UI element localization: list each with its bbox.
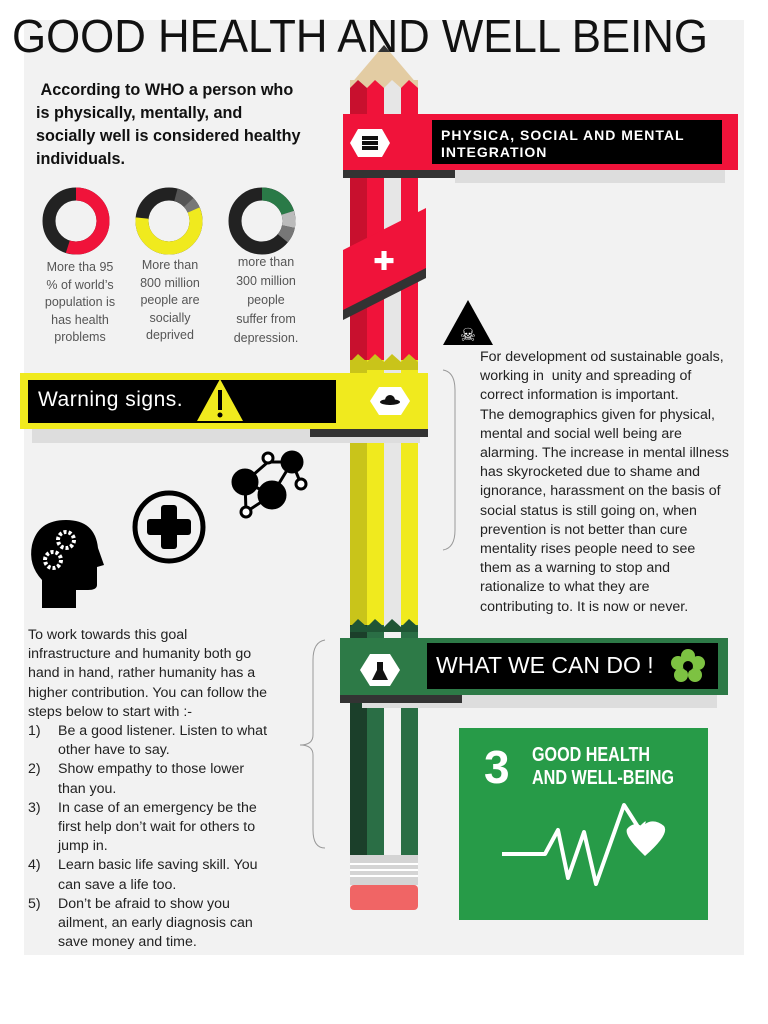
donut captions: has health (51, 312, 109, 326)
SDG 3 box: GOOD HEALTH (532, 744, 650, 766)
left list text: In case of an emergency be the (58, 800, 257, 816)
left list text: 1) (28, 723, 41, 739)
donut captions: more than (238, 255, 294, 269)
yellow bar (20, 373, 428, 443)
icon: planet hexagon (370, 387, 410, 415)
left list text: higher contribution. You can follow the (28, 685, 267, 701)
puzzle ribbon (343, 208, 426, 320)
donut captions: suffer from (236, 312, 296, 326)
intro text: individuals. (36, 150, 125, 168)
bracket left list (300, 640, 325, 848)
donut captions: % of world’s (46, 278, 114, 292)
left list text: than you. (58, 781, 116, 797)
left list text: Don’t be afraid to show you (58, 896, 230, 912)
right text block: them as a warning to stop and (480, 560, 670, 576)
right text block: working in unity and spreading of (480, 368, 691, 384)
right text block: correct information is important. (480, 387, 679, 403)
left list text: can save a life too. (58, 877, 176, 893)
intro text: is physically, mentally, and (36, 104, 242, 122)
bar label: physical social mental (441, 127, 685, 160)
SDG 3 box: 3 (484, 741, 510, 793)
right text block: alarming. The increase in mental illness (480, 445, 729, 461)
right text block: ignorance, harassment on the basis of (480, 483, 721, 499)
left list text: 3) (28, 800, 41, 816)
donut captions (45, 255, 298, 345)
green bar (340, 638, 728, 708)
puzzle ribbon: ✚ (373, 246, 395, 276)
bar label: warning signs: Warning signs. (38, 388, 183, 411)
right text block: social status is still going on, when (480, 503, 697, 519)
donut charts (49, 194, 289, 248)
right text block: For development od sustainable goals, (480, 349, 724, 365)
icon: skull triangle: ☠ (460, 325, 476, 345)
left list text: jump in. (58, 838, 108, 854)
intro text: According to WHO a person who (40, 81, 293, 99)
donut captions: More tha 95 (47, 260, 113, 274)
right text block: mentality rises people need to see (480, 541, 695, 557)
left list text: 4) (28, 857, 41, 873)
right text block: mental and social well being are (480, 426, 682, 442)
icon: network (233, 452, 306, 517)
bracket right text (443, 370, 455, 550)
donut captions: population is (45, 295, 115, 309)
donut captions: depression. (234, 331, 298, 345)
SDG 3 box: AND WELL-BEING (532, 767, 674, 789)
donut captions: people are (140, 293, 200, 307)
intro text (36, 81, 301, 168)
left list text: Learn basic life saving skill. You (58, 857, 258, 873)
donut captions: More than (142, 258, 198, 272)
right text block: contributing to. It is now or never. (480, 599, 688, 615)
bar label: physical social mental: PHYSICA, SOCIAL AND MENTAL (441, 127, 685, 143)
intro text: socially well is considered healthy (36, 127, 301, 145)
icon: books hexagon (350, 129, 390, 157)
left list text: Show empathy to those lower (58, 761, 244, 777)
left list text: steps below to start with :- (28, 704, 192, 720)
donut captions: 800 million (140, 276, 200, 290)
left list text (28, 627, 267, 950)
bar label: physical social mental: INTEGRATION (441, 144, 547, 160)
red bar (343, 114, 738, 183)
left list text: ailment, an early diagnosis can (58, 915, 253, 931)
icon: flask hexagon (360, 654, 400, 686)
left list text: Be a good listener. Listen to what (58, 723, 267, 739)
donut captions: deprived (146, 328, 194, 342)
icon: skull triangle (443, 300, 493, 345)
donut captions: people (247, 293, 285, 307)
donut captions: problems (54, 330, 106, 344)
donut captions: socially (150, 310, 190, 324)
icon: head with gears (31, 520, 104, 608)
left list text: 2) (28, 761, 41, 777)
right text block: has skyrocketed due to shame and (480, 464, 700, 480)
icon: flower (671, 649, 705, 682)
icon: medical plus (135, 493, 203, 561)
left list text: hand in hand, rather humanity has a (28, 665, 255, 681)
pencil (350, 45, 418, 910)
right text block: The demographics given for physical, (480, 407, 715, 423)
donut captions: 300 million (236, 274, 296, 288)
left list text: To work towards this goal (28, 627, 187, 643)
left list text: other have to say. (58, 742, 170, 758)
SDG 3 box (459, 728, 708, 920)
right text block: rationalize to what they are (480, 579, 650, 595)
left list text: 5) (28, 896, 41, 912)
left list text: first help don’t wait for others to (58, 819, 255, 835)
left list text: save money and time. (58, 934, 197, 950)
left list text: infrastructure and humanity both go (28, 646, 251, 662)
right text block: prevention is not better than cure (480, 522, 687, 538)
right text block (480, 349, 729, 615)
bar label: what we can do: WHAT WE CAN DO ! (436, 652, 654, 678)
